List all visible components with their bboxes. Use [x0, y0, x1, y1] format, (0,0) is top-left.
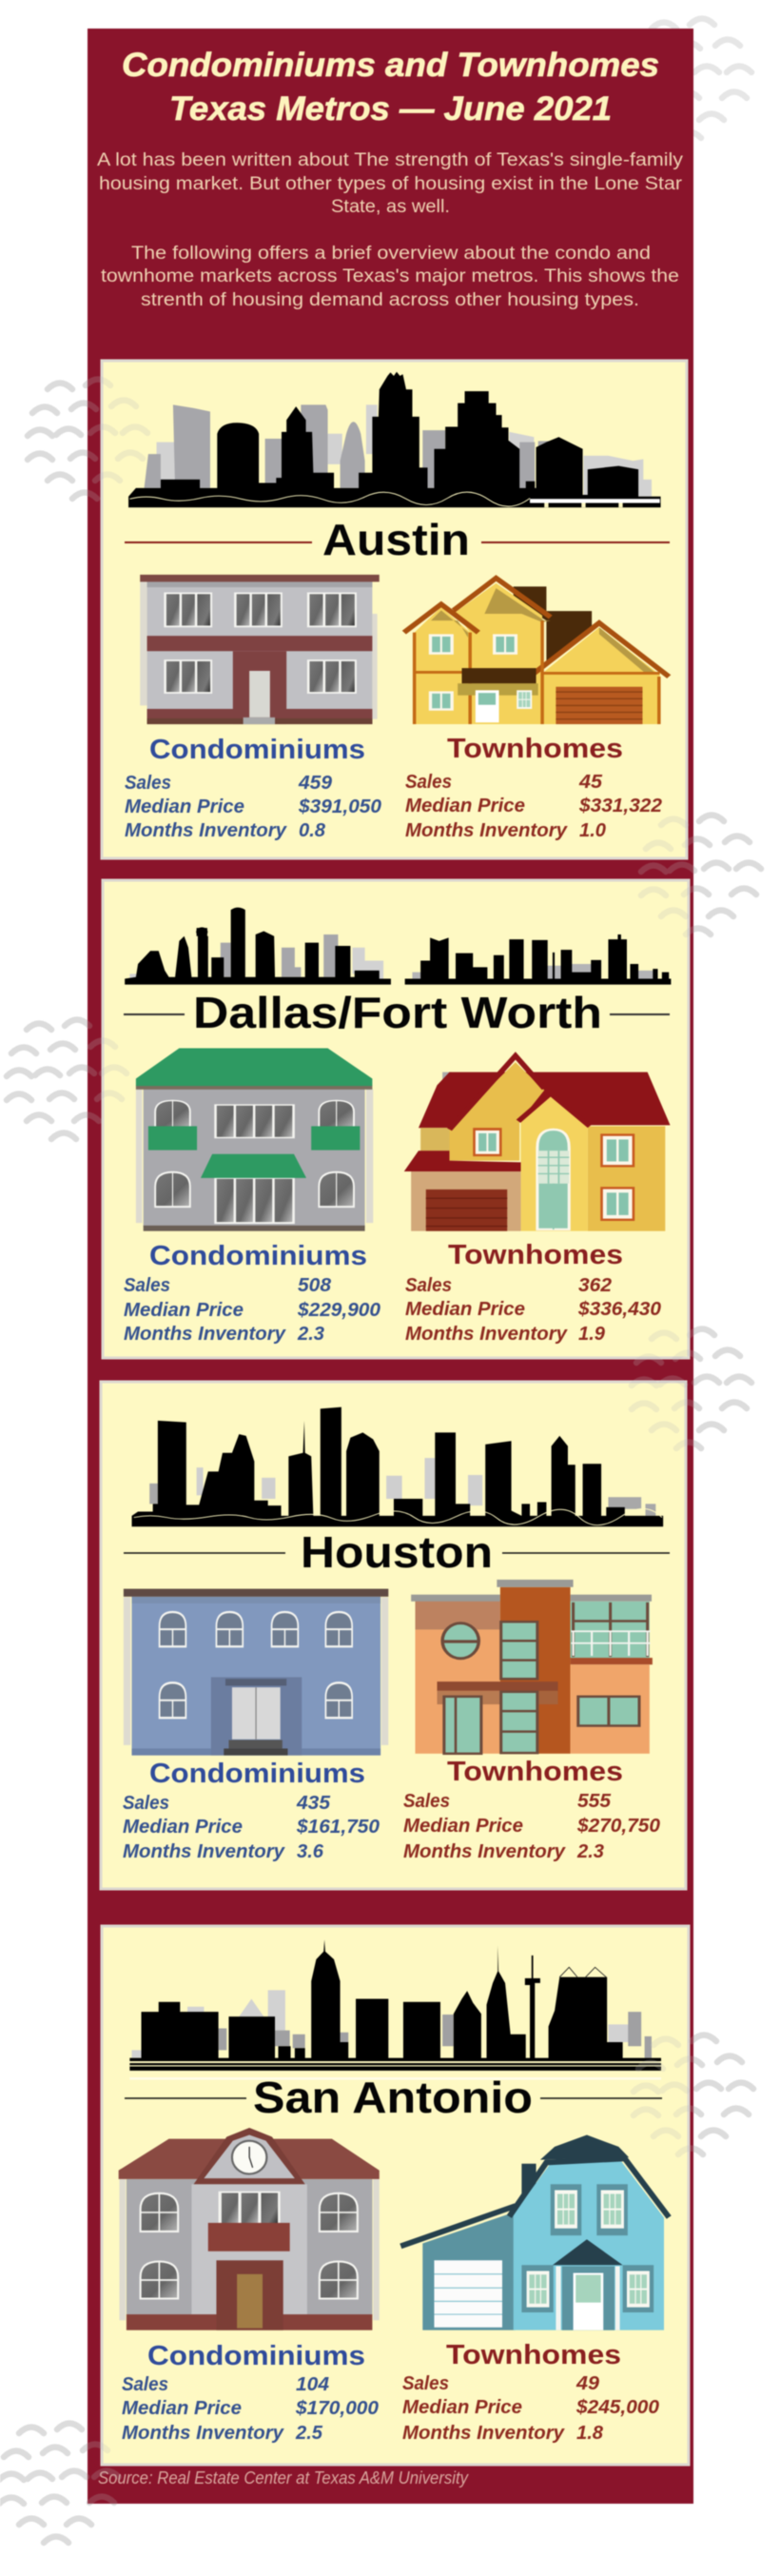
panel: Houston: [101, 1382, 686, 1889]
icon: Austin townhome: [404, 578, 669, 724]
stats: Dallas townhomes: 362: [578, 1275, 612, 1296]
intro text block: townhome markets across Texas's major metros. This shows the: [101, 266, 679, 286]
stats: Dallas condominiums: Median Price: [124, 1300, 244, 1321]
stats: Houston townhomes: 2.3: [576, 1841, 604, 1862]
icon: San Antonio condominium building: [119, 2128, 380, 2330]
intro text block: A lot has been written about The strength of Texas's single-family: [97, 150, 684, 170]
stats: Houston townhomes: [403, 1791, 660, 1862]
stats: Dallas condominiums: $229,900: [297, 1300, 380, 1321]
label: San Antonio townhomes: Townhomes: [446, 2340, 621, 2370]
stats: Dallas condominiums: [124, 1275, 380, 1345]
stats: Houston townhomes: Sales: [403, 1791, 450, 1812]
stats: Houston condominiums: [123, 1793, 380, 1862]
title: Condominiums and Townhomes: [122, 47, 659, 84]
skyline: Austin: [128, 372, 661, 507]
stats: Dallas townhomes: $336,430: [577, 1299, 661, 1320]
stats: Austin condominiums: [125, 773, 381, 841]
skyline: Houston: [132, 1407, 663, 1526]
heading: Houston: Houston: [301, 1527, 493, 1577]
stats: Austin townhomes: 1.0: [579, 820, 606, 841]
stats: Austin townhomes: $331,322: [578, 796, 662, 816]
stats: Houston townhomes: 555: [577, 1791, 612, 1812]
stats: Dallas townhomes: 1.9: [578, 1324, 606, 1345]
icon: Austin condominium building: [140, 575, 380, 724]
stats: San Antonio condominiums: $170,000: [295, 2398, 379, 2419]
stats: Houston condominiums: 435: [296, 1793, 331, 1814]
title: Texas Metros — June 2021: [169, 90, 612, 128]
stats: San Antonio condominiums: 104: [296, 2374, 329, 2395]
stats: Austin condominiums: $391,050: [298, 796, 381, 817]
label: San Antonio condominiums: Condominiums: [147, 2341, 365, 2371]
stats: Austin condominiums: 0.8: [299, 820, 326, 841]
icon: Houston condominium building: [124, 1589, 388, 1756]
stats: San Antonio condominiums: Median Price: [122, 2398, 242, 2419]
stats: Austin condominiums: 459: [298, 773, 333, 794]
label: Austin townhomes: Townhomes: [447, 734, 623, 764]
heading: San Antonio: San Antonio: [253, 2073, 533, 2122]
panel: San Antonio: [102, 1926, 689, 2465]
stats: Houston townhomes: $270,750: [576, 1816, 660, 1837]
stats: San Antonio townhomes: 1.8: [576, 2423, 604, 2444]
icon: San Antonio townhome: [400, 2134, 669, 2330]
stats: Dallas condominiums: 508: [298, 1275, 332, 1296]
label: Houston townhomes: Townhomes: [447, 1757, 623, 1787]
stats: Austin townhomes: 45: [578, 772, 603, 793]
stats: San Antonio townhomes: Median Price: [402, 2397, 522, 2418]
intro text block: State, as well.: [331, 197, 450, 217]
stats: Austin townhomes: Sales: [405, 772, 452, 793]
stats: Austin townhomes: Median Price: [405, 796, 525, 816]
stats: Austin condominiums: Months Inventory: [125, 820, 287, 841]
stats: San Antonio townhomes: Sales: [402, 2373, 449, 2394]
heading: Austin: Austin: [322, 515, 470, 564]
skyline: San Antonio: [129, 1939, 661, 2078]
icon: Dallas condominium building: [136, 1048, 373, 1231]
stats: Dallas condominiums: Months Inventory: [124, 1324, 286, 1345]
icon: Dallas townhome: [404, 1055, 671, 1231]
intro text block: [97, 150, 684, 310]
poster background: [88, 29, 693, 2504]
stats: Dallas condominiums: 2.3: [297, 1324, 324, 1345]
stats: Houston condominiums: Median Price: [123, 1817, 243, 1838]
stats: Dallas townhomes: Median Price: [405, 1299, 525, 1320]
stats: Houston condominiums: 3.6: [297, 1841, 324, 1862]
stats: San Antonio townhomes: Months Inventory: [402, 2423, 565, 2444]
label: Dallas townhomes: Townhomes: [448, 1240, 623, 1270]
stats: San Antonio townhomes: 49: [575, 2373, 600, 2394]
stats: Dallas townhomes: Sales: [405, 1275, 452, 1296]
icon: Houston townhome: [411, 1580, 653, 1754]
stats: Houston condominiums: $161,750: [296, 1817, 380, 1838]
stats: Dallas townhomes: Months Inventory: [405, 1324, 568, 1345]
panel: Austin: [102, 361, 687, 858]
stats: Austin townhomes: Months Inventory: [405, 820, 568, 841]
heading: Dallas/Fort Worth: Dallas/Fort Worth: [193, 988, 602, 1037]
intro text block: The following offers a brief overview about the condo and: [131, 244, 651, 264]
label: Austin condominiums: Condominiums: [149, 735, 365, 765]
stats: Austin condominiums: Sales: [125, 773, 171, 794]
stats: San Antonio townhomes: $245,000: [575, 2397, 659, 2418]
stats: San Antonio condominiums: Months Inventory: [122, 2423, 284, 2444]
panel: Dallas/Fort Worth: [103, 880, 689, 1358]
label: Dallas condominiums: Condominiums: [149, 1241, 367, 1271]
stats: Houston condominiums: Sales: [123, 1793, 169, 1814]
intro text block: strenth of housing demand across other housing types.: [141, 290, 639, 310]
stats: Austin condominiums: Median Price: [125, 796, 244, 817]
stats: San Antonio condominiums: Sales: [122, 2374, 168, 2395]
skyline: Fort Worth: [405, 934, 671, 985]
source note: Source: Real Estate Center at Texas A&M University: [98, 2468, 469, 2488]
stats: San Antonio townhomes: [402, 2373, 659, 2444]
stats: Houston townhomes: Months Inventory: [403, 1841, 566, 1862]
skyline: Dallas: [125, 908, 391, 985]
title: [122, 47, 659, 128]
stats: San Antonio condominiums: 2.5: [295, 2423, 323, 2444]
stats: Houston townhomes: Median Price: [403, 1816, 523, 1837]
label: Houston condominiums: Condominiums: [149, 1759, 365, 1789]
stats: Dallas condominiums: Sales: [124, 1275, 170, 1296]
stats: Dallas townhomes: [405, 1275, 661, 1345]
stats: Houston condominiums: Months Inventory: [123, 1841, 285, 1862]
stats: Austin townhomes: [405, 772, 662, 841]
intro text block: housing market. But other types of housing exist in the Lone Star: [99, 174, 683, 194]
stats: San Antonio condominiums: [122, 2374, 379, 2444]
